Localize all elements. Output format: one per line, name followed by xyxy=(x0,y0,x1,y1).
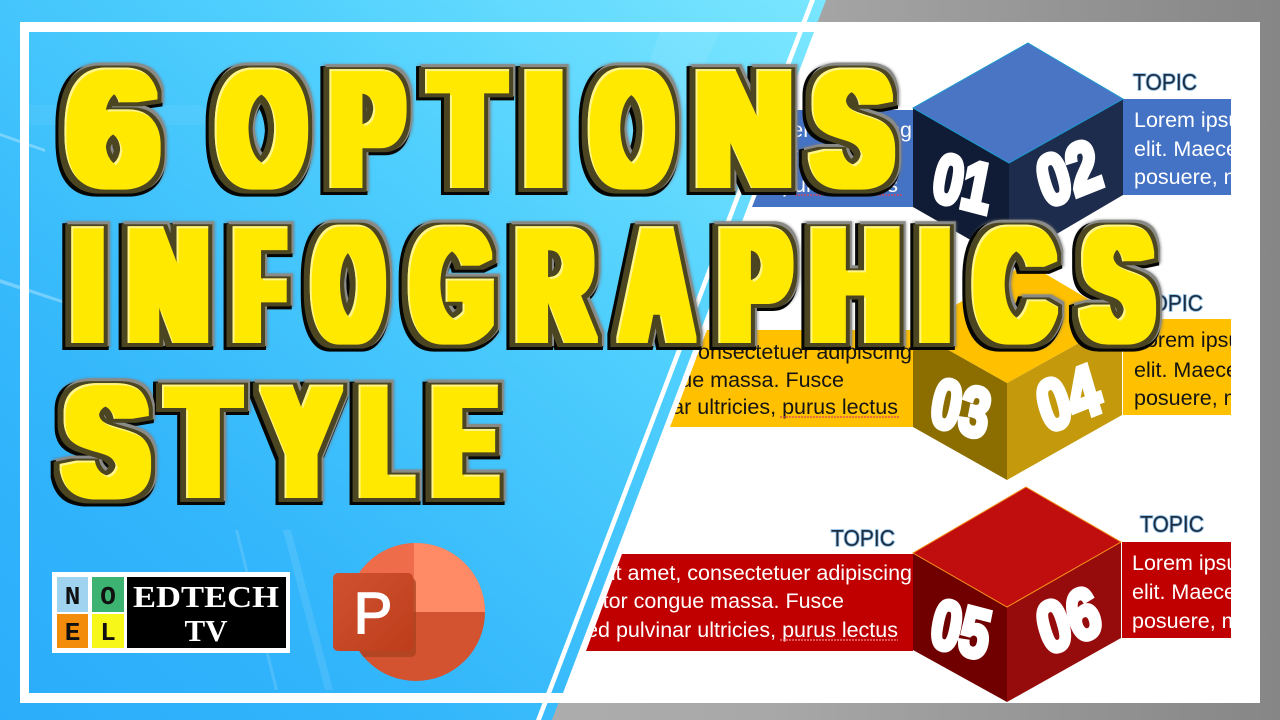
icon: blue cube 01 02: 01 xyxy=(927,139,999,228)
icon: PowerPoint xyxy=(333,543,485,681)
title: O xyxy=(219,37,304,220)
icon: blue cube 01 02 xyxy=(913,43,1123,262)
outer blue diagonal panel xyxy=(0,0,826,720)
icon: yellow cube 03 04: 04 xyxy=(1028,348,1110,448)
title: O xyxy=(315,195,381,375)
logo: Noel EdTech TV: EDTECH xyxy=(133,579,279,614)
panel: red left text box: Lorem ipsum dolor sit amet, consectetuer adipiscing xyxy=(416,561,912,585)
title: E xyxy=(434,355,494,529)
title: 6 xyxy=(68,37,158,220)
title: S xyxy=(813,37,891,220)
heading: topic 06: TOPIC xyxy=(1140,511,1204,537)
panel: red left text box: posuere, magna sed pulvinar ultricies, purus lectus xyxy=(414,618,898,642)
title: P xyxy=(721,195,788,375)
logo: Noel EdTech TV: E xyxy=(65,618,80,648)
logo: Noel EdTech TV: L xyxy=(100,618,116,648)
icon: blue cube 01 02: 02 xyxy=(1028,124,1109,223)
title: G xyxy=(412,195,491,375)
icon: red cube 05 06 xyxy=(913,487,1121,702)
title: I xyxy=(74,195,101,375)
panel: blue right text box xyxy=(1123,99,1231,195)
panel: red left text box: elit. Maecenas porttitor congue massa. Fusce xyxy=(410,589,844,613)
title: I xyxy=(922,195,947,375)
title: C xyxy=(976,195,1052,375)
panel: blue left text box xyxy=(752,110,913,207)
logo: Noel EdTech TV xyxy=(52,572,290,653)
panel: red right text box xyxy=(1122,542,1231,638)
heading: topic 04: TOPIC xyxy=(1139,290,1203,316)
panel: blue left text box: elit. Maecenas porttitor congue massa. Fusce xyxy=(410,146,844,170)
title: T xyxy=(170,355,236,529)
panel: yellow left text box: posuere, magna sed pulvinar ultricies, purus lectus xyxy=(414,395,898,419)
title: L xyxy=(362,355,409,529)
title: T xyxy=(433,37,501,220)
panel: blue left text box: posuere, magna sed pulvinar ultricies, purus lectus xyxy=(414,173,898,197)
icon: red cube 05 06: 05 xyxy=(925,585,997,674)
title: R xyxy=(518,195,591,375)
title: S xyxy=(65,355,147,529)
panel: yellow right text box: elit. Maecenas xyxy=(1134,358,1273,382)
heading: topic 05: TOPIC xyxy=(831,525,895,551)
inner blue diagonal panel xyxy=(29,32,814,693)
title: N xyxy=(696,37,791,220)
panel: blue right text box: elit. Maecenas xyxy=(1134,137,1273,161)
title: I xyxy=(524,37,563,220)
panel: yellow left text box: Lorem ipsum dolor sit amet, consectetuer adipiscing xyxy=(416,340,912,364)
title: H xyxy=(811,195,899,375)
heading: topic 02: TOPIC xyxy=(1133,69,1197,95)
icon: yellow cube 03 04 xyxy=(913,263,1122,480)
panel: red left text box xyxy=(586,554,913,651)
title xyxy=(65,37,1151,529)
icon: red cube 05 06: 06 xyxy=(1028,571,1109,670)
icon: yellow cube 03 04: 03 xyxy=(925,364,997,453)
logo: Noel EdTech TV: N xyxy=(65,582,80,612)
panel: yellow left text box xyxy=(670,330,913,427)
title: S xyxy=(1084,195,1151,375)
panel: yellow left text box: elit. Maecenas porttitor congue massa. Fusce xyxy=(410,368,844,392)
title: F xyxy=(237,195,281,375)
icon: PowerPoint: P xyxy=(354,581,392,646)
title: A xyxy=(623,195,690,375)
logo: Noel EdTech TV: TV xyxy=(184,613,228,648)
background light streaks xyxy=(0,32,720,690)
logo: Noel EdTech TV: O xyxy=(100,582,116,612)
panel: yellow right text box xyxy=(1123,319,1231,415)
title: Y xyxy=(266,355,336,529)
white diagonal stripe xyxy=(536,0,815,720)
panel: red right text box: elit. Maecenas xyxy=(1132,580,1271,604)
panel: blue left text box: Lorem ipsum dolor sit amet, consectetuer adipiscing xyxy=(416,118,912,142)
title: N xyxy=(130,195,206,375)
title: P xyxy=(331,37,401,220)
title: O xyxy=(593,37,670,220)
